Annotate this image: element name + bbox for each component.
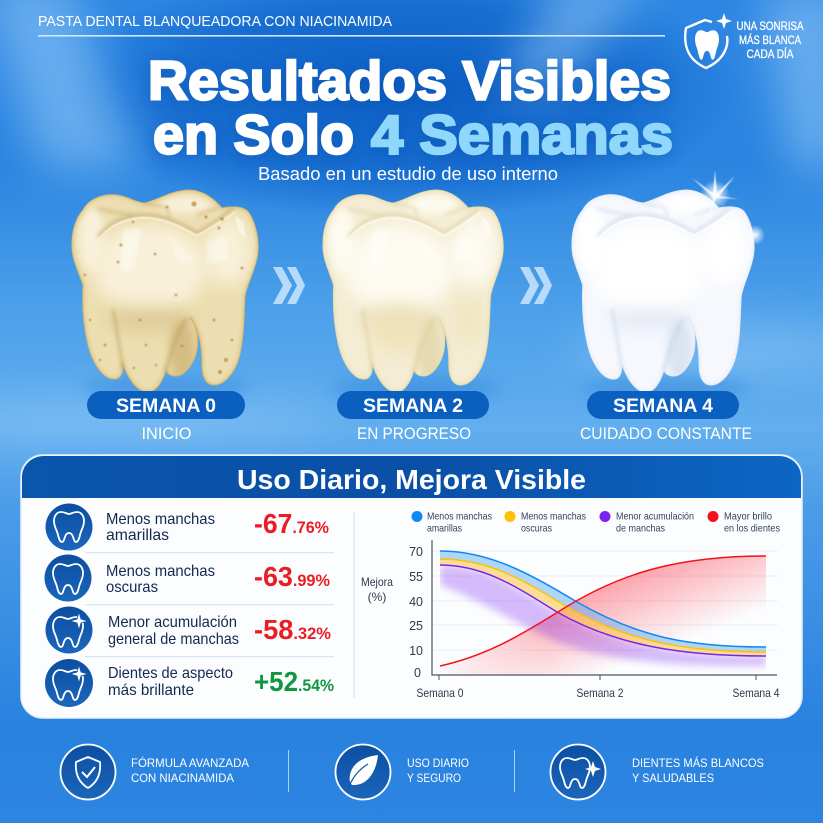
stage: semana 0: INICIO: [142, 425, 192, 443]
line chart: Semana 4: [732, 686, 780, 700]
top label: PASTA DENTAL BLANQUEADORA CON NIACINAMIDA: [38, 14, 392, 30]
feature: advanced formula: [60, 744, 249, 800]
line chart: 70: [409, 545, 423, 559]
chart legend: de manchas: [616, 522, 665, 534]
top rule: [38, 35, 665, 37]
title: [148, 50, 673, 166]
feature: daily safe use: [336, 744, 469, 800]
line chart: 40: [409, 595, 423, 609]
row: brighter teeth: +52.54%: [254, 666, 334, 697]
stage: semana 4: SEMANA 4: [613, 396, 713, 417]
sparkle on white tooth: [692, 170, 765, 245]
stage: semana 4: CUIDADO CONSTANTE: [580, 425, 752, 443]
chart legend: oscuras: [521, 522, 552, 534]
line chart: [361, 540, 780, 700]
tooth: week 4 white: [572, 190, 754, 392]
arrow: week 2 to week 4: [520, 267, 552, 304]
tooth shadows: [81, 381, 751, 395]
row: overall stain build-up: Menor acumulación: [108, 614, 237, 631]
feature: daily safe use: Y SEGURO: [407, 771, 461, 785]
stage: semana 2: [337, 391, 489, 443]
logo: shield with tooth: [685, 13, 732, 68]
feature: whiter healthier teeth: Y SALUDABLES: [632, 771, 714, 785]
chart legend: en los dientes: [724, 522, 780, 534]
logo slogan: CADA DÍA: [746, 48, 794, 61]
tooth: week 2 in progress: [323, 190, 503, 392]
row: overall stain build-up: [46, 606, 331, 654]
stage: semana 4: [580, 391, 752, 443]
line chart: Semana 2: [576, 686, 624, 700]
row: dark stains: Menos manchas: [106, 563, 215, 580]
logo slogan: UNA SONRISA: [736, 21, 804, 33]
row: yellow stains: [46, 504, 329, 550]
logo slogan: MÁS BLANCA: [739, 34, 801, 47]
row: yellow stains: amarillas: [106, 527, 169, 544]
row: brighter teeth: más brillante: [108, 682, 194, 699]
line chart: 55: [409, 570, 423, 584]
feature: whiter healthier teeth: [550, 744, 764, 800]
logo slogan: [736, 21, 804, 61]
chart legend: Menos manchas: [427, 510, 492, 522]
title: Resultados Visibles: [148, 50, 671, 112]
feature: advanced formula: CON NIACINAMIDA: [131, 771, 234, 785]
chart legend: [412, 510, 780, 534]
feature: advanced formula: FÓRMULA AVANZADA: [131, 755, 249, 770]
panel: daily use: [21, 455, 802, 718]
chart legend: amarillas: [427, 522, 462, 534]
line chart: 0: [414, 666, 421, 680]
panel heading: Uso Diario, Mejora Visible: [237, 464, 586, 495]
row: overall stain build-up: general de manchas: [108, 631, 239, 648]
panel header: [22, 456, 801, 498]
tooth: week 0 stained: [72, 190, 258, 392]
line chart: 25: [409, 619, 423, 633]
row: brighter teeth: Dientes de aspecto: [108, 665, 233, 682]
stage: semana 2: SEMANA 2: [363, 396, 463, 417]
feature: whiter healthier teeth: DIENTES MÁS BLANCOS: [632, 755, 764, 770]
line chart: Semana 0: [416, 686, 464, 700]
line chart: Mejora: [361, 575, 393, 589]
stage: semana 0: SEMANA 0: [116, 396, 216, 417]
chart legend: Menor acumulación: [616, 510, 694, 522]
row: dark stains: oscuras: [106, 579, 158, 596]
chart legend: Menos manchas: [521, 510, 586, 522]
line chart: (%): [368, 590, 386, 604]
title: 4 Semanas: [371, 104, 673, 166]
stage: semana 2: EN PROGRESO: [357, 425, 471, 443]
row: yellow stains: Menos manchas: [106, 511, 215, 528]
title: en Solo: [153, 104, 354, 166]
feature: daily safe use: USO DIARIO: [407, 756, 469, 770]
stage: semana 0: [87, 391, 245, 443]
line chart: 10: [409, 644, 423, 658]
row: brighter teeth: [45, 659, 334, 707]
arrow: week 0 to week 2: [273, 267, 305, 304]
row: dark stains: [44, 554, 330, 602]
row: yellow stains: -67.76%: [254, 508, 329, 539]
row: dark stains: -63.99%: [254, 561, 330, 592]
row: overall stain build-up: -58.32%: [254, 614, 331, 645]
subtitle: Basado en un estudio de uso interno: [258, 163, 558, 184]
chart legend: Mayor brillo: [724, 510, 772, 522]
